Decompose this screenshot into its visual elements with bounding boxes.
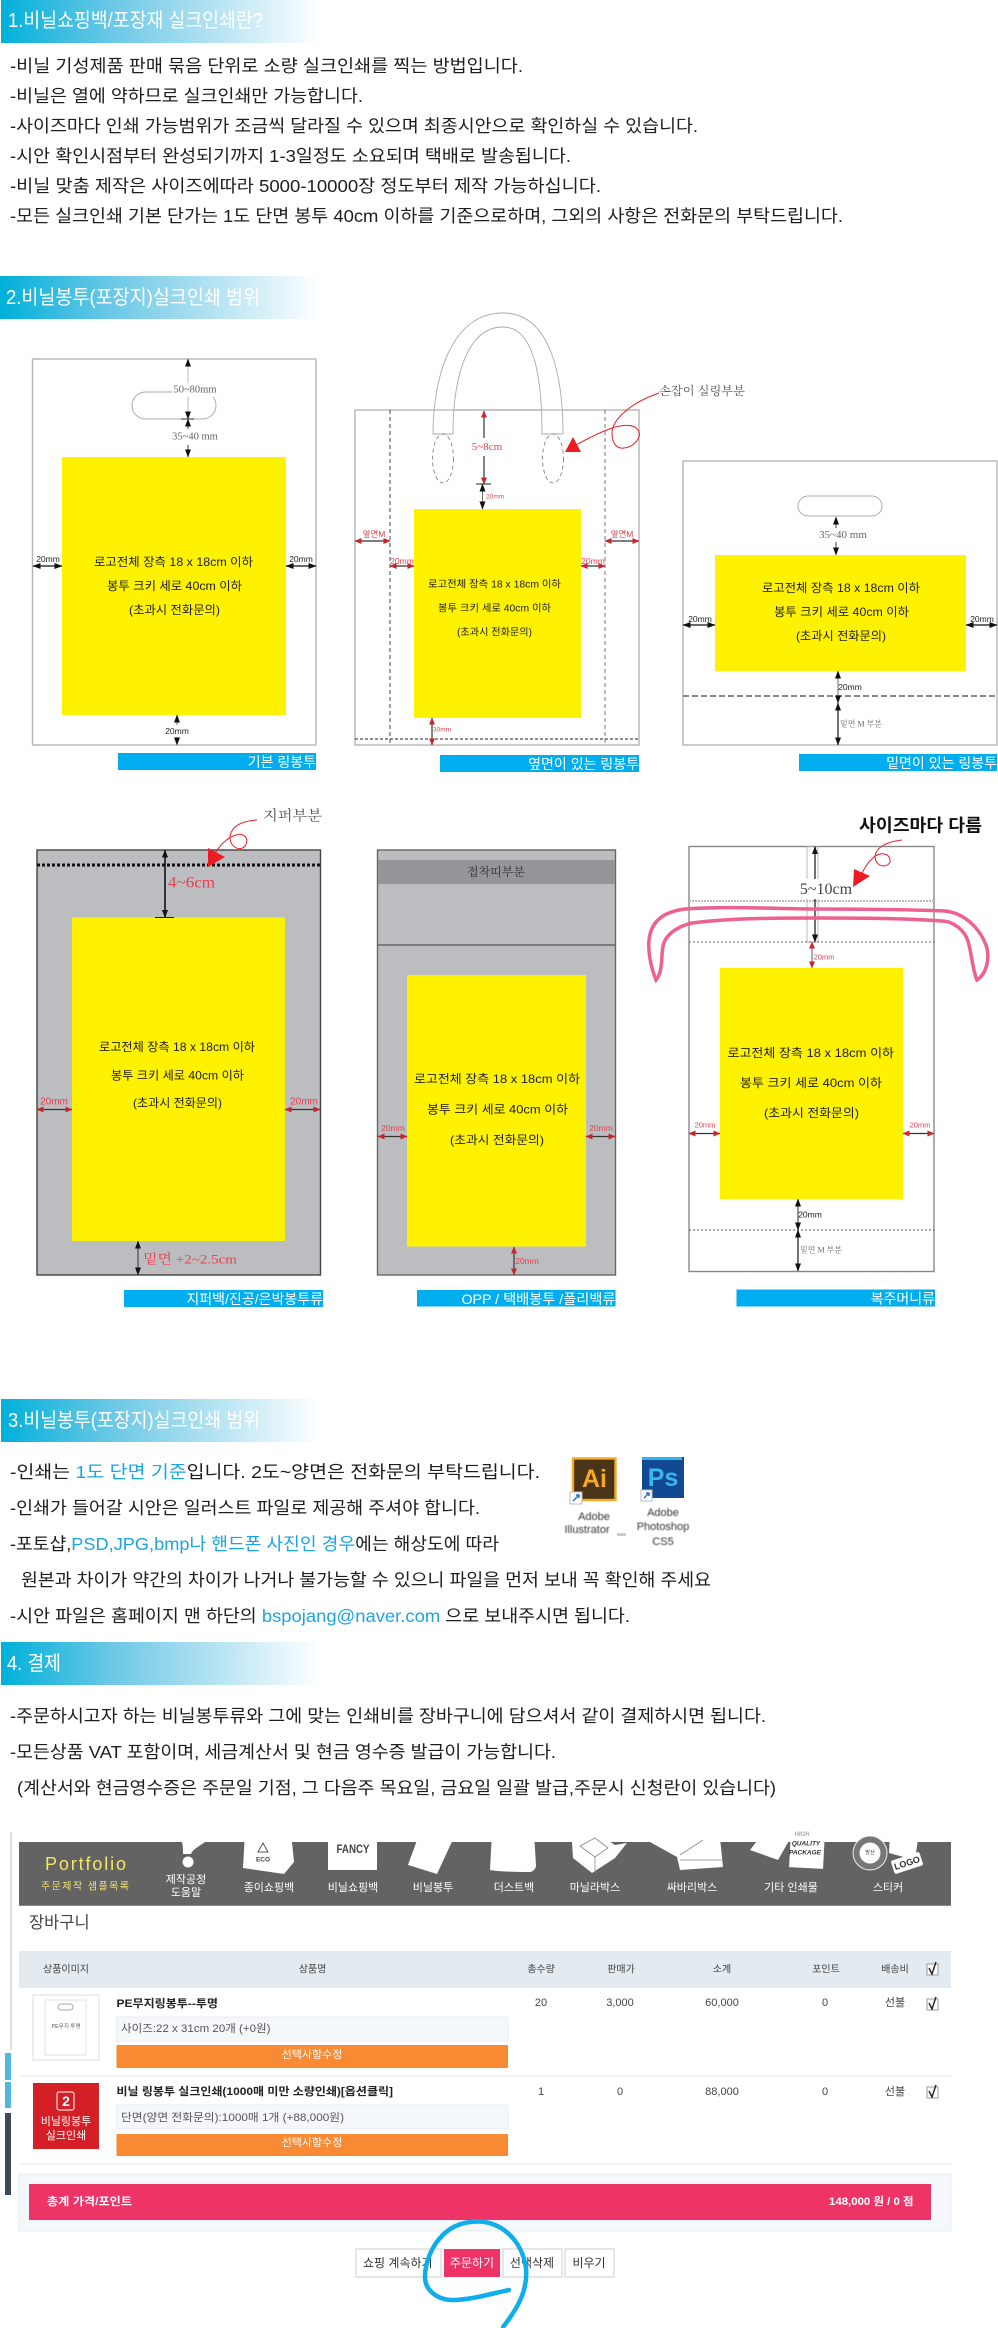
- panel: OPP bag: 로고전체 장측 18 x 18cm 이하: [414, 1072, 580, 1086]
- heading: section 2: [0, 276, 320, 319]
- panel: ring bag with side gusset: 옆면M: [611, 529, 633, 539]
- icon: Adobe Photoshop: Photoshop: [637, 1521, 689, 1533]
- icon: dust bag: [490, 1832, 536, 1872]
- panel: ring bag with side gusset: 30mm: [433, 726, 451, 734]
- text block: section 4 payment: -주문하시고자 하는 비닐봉투류와 그에 맞는 인쇄비를 장바구니에 담으셔서 같이 결제하시면 됩니다.: [10, 1706, 766, 1726]
- panel: basic ring bag: 봉투 크키 세로 40cm 이하: [107, 579, 242, 593]
- panel: cart row 1: [19, 1995, 951, 2076]
- panel: cart table header: 상품명: [299, 1964, 326, 1976]
- icon: help question mark: [182, 1842, 205, 1867]
- panel: cart row 2: 선불: [885, 2085, 905, 2098]
- panel: drawstring bag: [649, 816, 988, 1306]
- panel: ring bag with side gusset: [355, 313, 745, 772]
- panel: cart buttons: 주문하기: [450, 2256, 494, 2270]
- heading: section 4: 4. 결제: [7, 1652, 61, 1675]
- panel: ring bag with side gusset: 20mm: [390, 556, 414, 566]
- panel: drawstring bag: 20mm: [814, 952, 834, 962]
- icon: Adobe Illustrator: Illustrator: [564, 1524, 610, 1536]
- text block: section 3 instructions: [10, 1462, 711, 1626]
- panel: cart row 2: 단면(양면 전화문의):1000매 1개 (+88,000원): [121, 2111, 344, 2124]
- panel: cart screenshot left edge: [5, 1832, 12, 2195]
- panel: cart row 1: 60,000: [705, 1997, 739, 2009]
- icon: printed matter: HIGH: [794, 1832, 810, 1838]
- text block: section 1 description: -비닐 맞춤 제작은 사이즈에따라 5000-10000장 정도부터 제작 가능하십니다.: [10, 176, 601, 196]
- panel: ring bag with bottom gusset: 20mm: [838, 682, 862, 692]
- nav labels: 마닐라박스: [570, 1881, 620, 1894]
- callout: zipper part: 지퍼부분: [263, 808, 323, 824]
- icon: paper bag: [243, 1832, 294, 1874]
- panel: OPP bag: 봉투 크키 세로 40cm 이하: [427, 1102, 568, 1116]
- text block: section 3 instructions: -포토샵,PSD,JPG,bmp나 핸드폰 사진인 경우 에는 해상도에 따라: [10, 1534, 499, 1554]
- heading: section 1: [1, 0, 320, 43]
- panel: cart row 1: 0: [822, 1997, 828, 2009]
- panel: cart row 2: 선택사항수정: [282, 2136, 342, 2149]
- panel: zipper bag: (초과시 전화문의): [133, 1096, 222, 1110]
- panel: OPP bag: 20mm: [589, 1123, 613, 1133]
- label: zipper bag: [124, 1290, 323, 1307]
- callout: varies by size: 사이즈마다 다름: [859, 816, 982, 836]
- panel: cart row 2: 실크인쇄: [46, 2129, 86, 2142]
- panel: drawstring bag: 밑면 M 부분: [800, 1244, 842, 1254]
- panel: cart table header: [19, 1951, 951, 1988]
- heading: cart: 장바구니: [29, 1913, 90, 1932]
- label: zipper bag: 지퍼백/진공/은박봉투류: [186, 1291, 323, 1307]
- icon: printed matter: PACKAGE: [789, 1850, 822, 1856]
- icon: printed matter: QUALITY: [792, 1840, 821, 1848]
- panel: ring bag with side gusset: (초과시 전화문의): [457, 626, 532, 638]
- panel: cart row 2: 88,000: [705, 2086, 739, 2098]
- panel: OPP bag: (초과시 전화문의): [450, 1133, 544, 1147]
- panel: cart row 1: PE무지링봉투--투명: [116, 1997, 218, 2010]
- nav labels: 스티커: [873, 1881, 903, 1894]
- panel: zipper bag: 20mm: [40, 1096, 68, 1108]
- panel: ring bag with bottom gusset: 35~40 mm: [819, 529, 867, 541]
- nav brand: 주문제작 샘플목록: [41, 1880, 129, 1892]
- nav labels: 더스트백: [494, 1881, 534, 1894]
- panel: cart buttons: 비우기: [572, 2256, 606, 2270]
- text block: section 1 description: -시안 확인시점부터 완성되기까지 1-3일정도 소요되며 택배로 발송됩니다.: [10, 146, 571, 166]
- icon: Adobe Illustrator: Ai: [582, 1465, 607, 1493]
- panel: ring bag with side gusset: 20mm: [581, 556, 605, 566]
- text block: section 3 instructions: -인쇄는 1도 단면 기준 입니다. 2도~양면은 전화문의 부탁드립니다.: [10, 1462, 540, 1482]
- nav labels: 기타 인쇄물: [764, 1881, 818, 1894]
- panel: ring bag with bottom gusset: 20mm: [688, 614, 712, 624]
- nav labels: [166, 1873, 903, 1899]
- panel: ring bag with bottom gusset: 봉투 크키 세로 40cm 이하: [774, 605, 909, 619]
- panel: cart row 2: 비닐링봉투: [41, 2115, 91, 2128]
- panel: zipper bag: [37, 808, 323, 1307]
- text block: section 1 description: -사이즈마다 인쇄 가능범위가 조금씩 달라질 수 있으며 최종시안으로 확인하실 수 있습니다.: [10, 116, 698, 136]
- text block: section 1 description: [10, 56, 843, 226]
- panel: drawstring bag: 20mm: [910, 1120, 930, 1130]
- panel: cart row 2: 0: [822, 2086, 828, 2098]
- panel: cart buttons: 선택삭제: [510, 2256, 554, 2270]
- panel: cart row 1: 선택사항수정: [282, 2048, 342, 2061]
- panel: zipper bag: 밑면 +2~2.5cm: [143, 1252, 237, 1266]
- panel: zipper bag: 봉투 크키 세로 40cm 이하: [111, 1068, 244, 1082]
- panel: OPP bag: 20mm: [515, 1256, 539, 1266]
- panel: zipper bag: 4~6cm: [168, 874, 216, 892]
- panel: drawstring bag: 20mm: [695, 1120, 715, 1130]
- panel: ring bag with side gusset: 5~8cm: [472, 441, 503, 453]
- text block: section 4 payment: (계산서와 현금영수증은 주문일 기점, 그 다음주 목요일, 금요일 일괄 발급,주문시 신청란이 있습니다): [17, 1778, 776, 1798]
- text block: section 1 description: -비닐 기성제품 판매 묶음 단위로 소량 실크인쇄를 찍는 방법입니다.: [10, 56, 523, 76]
- panel: basic ring bag: 35~40 mm: [172, 432, 218, 442]
- icon: manila box: [572, 1832, 627, 1873]
- panel: ring bag with bottom gusset: 20mm: [970, 614, 994, 624]
- panel: basic ring bag: 로고전체 장측 18 x 18cm 이하: [94, 555, 253, 569]
- panel: total bar: [19, 2174, 951, 2231]
- heading: section 3: 3.비닐봉투(포장지)실크인쇄 범위: [8, 1409, 260, 1432]
- panel: cart table header: 총수량: [527, 1964, 555, 1976]
- panel: cart row 2: 비닐 링봉투 실크인쇄(1000매 미만 소량인쇄)[옵션클릭]: [116, 2084, 393, 2098]
- panel: basic ring bag: (초과시 전화문의): [129, 603, 220, 617]
- panel: ring bag with bottom gusset: 밑면 M 부분: [840, 718, 882, 728]
- panel: cart buttons: 쇼핑 계속하기: [363, 2256, 433, 2270]
- panel: cart table header: 판매가: [607, 1964, 635, 1976]
- panel: OPP bag: 20mm: [381, 1123, 405, 1133]
- label: OPP bag: OPP / 택배봉투 /폴리백류: [462, 1291, 616, 1307]
- icon: Adobe Photoshop: CS5: [652, 1536, 674, 1548]
- panel: OPP bag: [378, 850, 616, 1307]
- panel: zipper bag: 로고전체 장측 18 x 18cm 이하: [99, 1040, 255, 1054]
- panel: ring bag with bottom gusset: 로고전체 장측 18 x 18cm 이하: [762, 581, 920, 595]
- panel: cart table header: 배송비: [881, 1964, 909, 1976]
- panel: basic ring bag: 20mm: [36, 554, 60, 564]
- panel: ring bag with bottom gusset: [683, 461, 997, 771]
- callout: handle sealing: 손잡이 실링부분: [659, 383, 745, 398]
- panel: drawstring bag: (초과시 전화문의): [764, 1106, 859, 1120]
- nav brand: [41, 1854, 129, 1892]
- panel: ring bag with side gusset: 봉투 크키 세로 40cm 이하: [438, 602, 551, 614]
- panel: ring bag with side gusset: 옆면M: [363, 529, 385, 539]
- icon: stickers: LOGO: [893, 1854, 921, 1872]
- panel: cart row 1: 사이즈:22 x 31cm 20개 (+0원): [121, 2022, 270, 2035]
- panel: ring bag with side gusset: 20mm: [486, 494, 504, 500]
- panel: cart row 1: 3,000: [606, 1997, 634, 2009]
- panel: cart buttons: [356, 2249, 614, 2277]
- icon: vinyl shopping bag: [328, 1832, 377, 1870]
- icon: vinyl pouch: [408, 1832, 455, 1874]
- text block: section 4 payment: -모든상품 VAT 포함이며, 세금계산서 및 현금 영수증 발급이 가능합니다.: [10, 1742, 556, 1762]
- heading: section 1: 1.비닐쇼핑백/포장재 실크인쇄란?: [8, 9, 263, 32]
- panel: drawstring bag: 봉투 크키 세로 40cm 이하: [740, 1076, 882, 1090]
- heading: section 4: [1, 1642, 320, 1685]
- panel: basic ring bag: [32, 359, 316, 770]
- text block: section 3 instructions: -인쇄가 들어갈 시안은 일러스트 파일로 제공해 주셔야 합니다.: [10, 1498, 480, 1518]
- heading: section 2: 2.비닐봉투(포장지)실크인쇄 범위: [6, 286, 260, 309]
- callout: handle sealing: [565, 383, 745, 452]
- panel: drawstring bag: 로고전체 장측 18 x 18cm 이하: [728, 1046, 894, 1060]
- label: side gusset ring bag: [440, 755, 639, 772]
- label: basic ring bag: [118, 753, 316, 770]
- label: bottom gusset ring bag: [799, 754, 997, 771]
- callout: varies by size: [853, 816, 982, 887]
- nav labels: 싸바리박스: [667, 1881, 717, 1894]
- label: drawstring bag: [736, 1290, 935, 1306]
- label: bottom gusset ring bag: 밑면이 있는 링봉투: [886, 755, 997, 771]
- panel: cart row 1: 선불: [885, 1996, 905, 2009]
- panel: total bar: 총계 가격/포인트: [47, 2194, 132, 2208]
- panel: drawstring bag: 5~10cm: [800, 881, 853, 898]
- icon: pink handle: [649, 908, 988, 980]
- icon: Adobe Illustrator: Adobe: [578, 1511, 610, 1523]
- nav labels: 종이쇼핑백: [244, 1881, 294, 1894]
- panel: zipper bag: 20mm: [290, 1096, 318, 1108]
- panel: basic ring bag: 20mm: [289, 554, 313, 564]
- label: side gusset ring bag: 옆면이 있는 링봉투: [528, 756, 639, 772]
- icon: paper bag: ECO: [256, 1856, 270, 1864]
- icon: Adobe Photoshop: [637, 1457, 689, 1548]
- panel: cart table header: 포인트: [812, 1964, 840, 1976]
- icon: blue hand-drawn highlight circle: [425, 2222, 526, 2327]
- panel: drawstring bag: 20mm: [798, 1210, 822, 1220]
- panel: cart row 2: 1: [538, 2086, 544, 2098]
- label: basic ring bag: 기본 링봉투: [248, 754, 316, 770]
- icon: stickers: [853, 1832, 923, 1874]
- icon: Adobe Illustrator: [564, 1458, 626, 1536]
- text block: section 1 description: -비닐은 열에 약하므로 실크인쇄만 가능합니다.: [10, 86, 363, 106]
- panel: category navigation: [19, 1831, 951, 1906]
- label: drawstring bag: 복주머니류: [871, 1290, 935, 1306]
- nav labels: 제작공정: [166, 1873, 206, 1886]
- panel: cart row 2: 0: [617, 2086, 623, 2098]
- icon: stickers: 방산: [865, 1849, 875, 1856]
- panel: cart row 2: [19, 2083, 951, 2164]
- panel: cart row 2: 2: [62, 2093, 70, 2109]
- nav labels: 비닐봉투: [413, 1881, 453, 1894]
- panel: basic ring bag: 20mm: [165, 726, 189, 736]
- icon: Adobe Photoshop: Adobe: [647, 1507, 679, 1519]
- text block: section 3 instructions: 원본과 차이가 약간의 차이가 나거나 불가능할 수 있으니 파일을 먼저 보내 꼭 확인해 주세요: [21, 1570, 711, 1590]
- icon: Adobe Photoshop: Ps: [648, 1464, 678, 1492]
- panel: basic ring bag: 50~80mm: [173, 384, 217, 396]
- callout: zipper part: [208, 808, 323, 867]
- text block: section 4 payment: [10, 1706, 776, 1798]
- nav labels: 도움말: [171, 1886, 201, 1899]
- panel: cart table header: 소계: [713, 1964, 731, 1976]
- panel: total bar: 148,000 원 / 0 점: [829, 2194, 914, 2208]
- icon: vinyl shopping bag: FANCY: [336, 1842, 370, 1856]
- panel: cart table header: 상품이미지: [43, 1964, 89, 1976]
- icon: printed matter: [750, 1831, 825, 1869]
- nav brand: Portfolio: [45, 1854, 126, 1874]
- heading: section 3: [1, 1399, 320, 1442]
- nav labels: 비닐쇼핑백: [328, 1881, 378, 1894]
- text block: section 3 instructions: -시안 파일은 홈페이지 맨 하단의 bspojang@naver.com 으로 보내주시면 됩니다.: [10, 1606, 630, 1626]
- panel: ring bag with bottom gusset: (초과시 전화문의): [796, 629, 886, 643]
- panel: ring bag with side gusset: 로고전체 장측 18 x 18cm 이하: [428, 578, 561, 590]
- text block: section 1 description: -모든 실크인쇄 기본 단가는 1도 단면 봉투 40cm 이하를 기준으로하며, 그외의 사항은 전화문의 부탁드립니다.: [10, 206, 843, 226]
- panel: cart row 1: 20: [535, 1997, 547, 2009]
- icon: sabari box: [650, 1832, 723, 1870]
- panel: cart row 1: PE무지 투명: [51, 2022, 81, 2030]
- panel: OPP bag: 접착띠부분: [467, 864, 525, 879]
